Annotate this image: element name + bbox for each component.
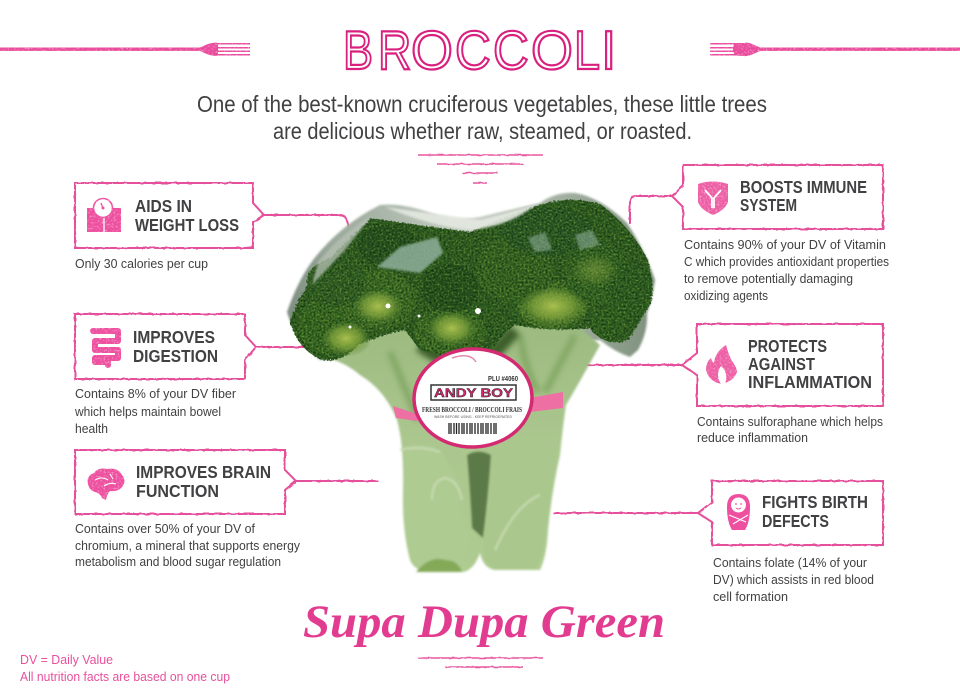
heading: birth defects [762, 492, 868, 531]
heading: inflammation: AGAINST [748, 354, 815, 374]
heading: digestion: IMPROVES [133, 327, 215, 347]
heading: immune: SYSTEM [740, 195, 797, 215]
fork: left [0, 43, 250, 56]
subtitle: One of the best-known cruciferous vegetables, these little trees [197, 91, 767, 117]
icon: swaddled baby [727, 494, 750, 530]
icon: shield [698, 182, 728, 215]
callout frame: brain [75, 450, 378, 514]
heading: digestion [133, 327, 218, 366]
text: birth defects [713, 555, 874, 604]
text: immune: oxidizing agents [684, 288, 768, 303]
title: L [574, 19, 600, 81]
barcode [449, 423, 496, 434]
text: inflammation: reduce inflammation [697, 430, 808, 445]
heading: immune [740, 177, 867, 215]
text: brain: chromium, a mineral that supports energy [75, 538, 300, 553]
subtitle [197, 91, 767, 144]
callout frame: birth defects [553, 481, 883, 545]
text: immune [684, 237, 889, 303]
heading: birth defects: DEFECTS [762, 511, 829, 531]
text: birth defects: DV) which assists in red blood [713, 572, 874, 587]
fork: right [710, 43, 960, 56]
panel: protects against inflammation [583, 324, 883, 445]
divider: bottom squiggles [418, 658, 543, 667]
icon: flame [706, 345, 737, 384]
text: immune: to remove potentially damaging [684, 271, 853, 286]
broccoli photo illustration [287, 193, 655, 572]
icon: scale [87, 198, 121, 232]
product label: FRESH BROCCOLI / BROCCOLI FRAIS [422, 405, 522, 414]
text: inflammation: Contains sulforaphane which helps [697, 414, 883, 429]
title: B [343, 19, 373, 81]
footnote: All nutrition facts are based on one cup [20, 669, 230, 684]
callout frame: weight loss [75, 183, 348, 248]
text: inflammation [697, 414, 883, 445]
text: brain [75, 521, 300, 569]
product label [412, 347, 534, 449]
divider: top squiggles [418, 155, 543, 183]
panel: improves brain function [75, 450, 378, 569]
panel: aids in weight loss [75, 183, 348, 271]
heading: inflammation [748, 336, 872, 392]
product label: WASH BEFORE USING - KEEP REFRIGERATED [434, 414, 512, 419]
heading: immune: BOOSTS IMMUNE [740, 177, 867, 197]
icon: intestine [93, 331, 118, 365]
heading: weight loss: WEIGHT LOSS [135, 215, 239, 235]
text: brain: metabolism and blood sugar regulation [75, 554, 281, 569]
panel: boosts immune system [630, 165, 889, 303]
heading: inflammation: INFLAMMATION [748, 372, 872, 392]
text: weight loss: Only 30 calories per cup [75, 256, 208, 271]
subtitle: are delicious whether raw, steamed, or roasted. [273, 118, 692, 144]
footnote: DV = Daily Value [20, 652, 113, 667]
brand logo: ANDY BOY [434, 386, 513, 400]
title: O [411, 20, 453, 81]
heading: digestion: DIGESTION [133, 346, 218, 366]
heading: brain: FUNCTION [136, 481, 219, 501]
callout frame: inflammation [583, 324, 883, 406]
icon: brain [88, 468, 124, 500]
tagline: Supa Dupa Green [303, 596, 665, 648]
rubber band [393, 392, 563, 421]
text: birth defects: Contains folate (14% of your [713, 555, 868, 570]
text: immune: C which provides antioxidant properties [684, 254, 889, 269]
text: digestion: which helps maintain bowel [74, 404, 221, 419]
panel: fights birth defects [553, 481, 883, 604]
title: C [493, 21, 529, 82]
highlights [312, 205, 619, 357]
plastic wrap [287, 193, 655, 360]
callout frame: digestion [75, 314, 306, 379]
heading: brain: IMPROVES BRAIN [136, 462, 271, 482]
heading: brain [136, 462, 271, 501]
heading: birth defects: FIGHTS BIRTH [762, 492, 868, 512]
title [343, 19, 616, 82]
title: I [601, 19, 616, 81]
callout frame: immune [630, 165, 883, 229]
text: brain: Contains over 50% of your DV of [75, 521, 255, 536]
text: immune: Contains 90% of your DV of Vitamin [684, 237, 886, 252]
title: C [455, 21, 491, 82]
text: digestion [74, 386, 237, 436]
text: digestion: health [75, 421, 108, 436]
heading: weight loss [135, 196, 239, 235]
title: R [378, 19, 411, 81]
heading: weight loss: AIDS IN [135, 196, 192, 216]
product label: PLU #4060 [488, 376, 518, 383]
text: digestion: Contains 8% of your DV fiber [75, 386, 237, 401]
panel: improves digestion [74, 314, 306, 436]
heading: inflammation: PROTECTS [748, 336, 827, 356]
title: O [531, 20, 573, 81]
footnote [20, 652, 230, 684]
stems [322, 310, 600, 572]
florets [290, 200, 652, 360]
text: birth defects: cell formation [713, 589, 788, 604]
